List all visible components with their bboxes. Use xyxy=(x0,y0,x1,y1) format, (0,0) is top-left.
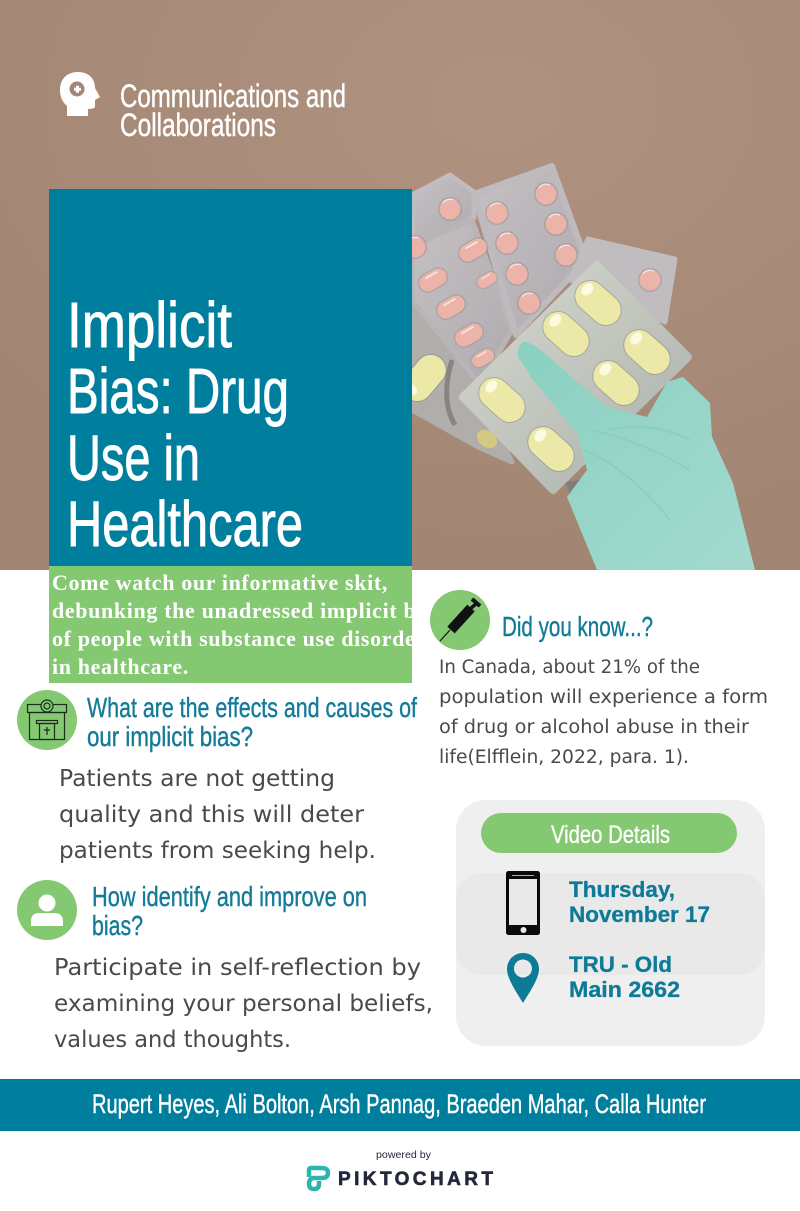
heading: Communications and Collaborations xyxy=(120,78,346,143)
title xyxy=(67,289,303,560)
icon: location pin xyxy=(507,953,539,1003)
hero photo: gloved hand holding blister packs xyxy=(0,0,800,570)
text: Canada statistic: In Canada, about 21% of the xyxy=(439,657,700,678)
logo: powered by Piktochart: powered by xyxy=(376,1149,432,1161)
title: Healthcare xyxy=(67,488,303,560)
text: self-reflection: values and thoughts. xyxy=(54,1027,291,1053)
heading: Did you know: Did you know...? xyxy=(502,611,653,642)
text: effects on patients: quality and this will deter xyxy=(59,802,365,828)
heading: effects and causes: our implicit bias? xyxy=(87,721,253,752)
panel: green invitation text: Come watch our informative skit, xyxy=(52,570,388,595)
icon: syringe xyxy=(430,590,490,650)
heading: Communications and Collaborations: Communications and xyxy=(120,78,346,114)
heading: identify and improve: How identify and improve on xyxy=(92,881,367,912)
title: Use in xyxy=(67,422,200,494)
panel: green invitation text: in healthcare. xyxy=(52,654,189,679)
logo: powered by Piktochart xyxy=(309,1149,493,1190)
heading: Communications and Collaborations: Collaborations xyxy=(120,107,276,143)
icon: smartphone xyxy=(506,871,540,935)
text: location: TRU - Old xyxy=(569,952,672,977)
text: self-reflection: examining your personal beliefs, xyxy=(54,991,433,1017)
icon: person xyxy=(17,880,77,940)
title: Bias: Drug xyxy=(67,355,289,427)
title: Implicit xyxy=(67,289,232,361)
panel: green invitation text: of people with substance use disorders xyxy=(52,626,435,651)
heading: effects and causes: What are the effects and causes of xyxy=(87,692,417,723)
text: date xyxy=(569,877,710,927)
text: Canada statistic: of drug or alcohol abuse in their xyxy=(439,717,749,738)
text: Canada statistic xyxy=(439,657,768,768)
text: self-reflection: Participate in self-reflection by xyxy=(54,955,421,981)
text: location xyxy=(569,952,680,1002)
logo: powered by Piktochart: PIKTOCHART xyxy=(338,1169,493,1190)
icon: hospital xyxy=(17,690,77,750)
panel: green invitation text xyxy=(49,566,444,683)
panel: video details xyxy=(456,800,765,1046)
text: Canada statistic: life(Elfflein, 2022, para. 1). xyxy=(439,747,689,768)
text: effects on patients: patients from seeking help. xyxy=(59,838,376,864)
text: Canada statistic: population will experience a form xyxy=(439,687,768,708)
text: effects on patients: Patients are not getting xyxy=(59,766,335,792)
icon: head with medical cross xyxy=(60,72,100,116)
heading: effects and causes xyxy=(87,692,417,752)
pill heading: Video Details xyxy=(481,813,737,853)
text: self-reflection xyxy=(54,955,433,1053)
panel: title block xyxy=(49,189,412,566)
text: effects on patients xyxy=(59,766,376,864)
panel: green invitation text: debunking the unadressed implicit bias xyxy=(52,598,444,623)
text: location: Main 2662 xyxy=(569,977,680,1002)
text: date: Thursday, xyxy=(569,877,675,902)
text: date: November 17 xyxy=(569,902,710,927)
pill heading: Video Details: Video Details xyxy=(551,821,670,849)
heading: identify and improve: bias? xyxy=(92,910,143,941)
heading: identify and improve xyxy=(92,881,367,941)
footer band: team names xyxy=(0,1079,800,1131)
